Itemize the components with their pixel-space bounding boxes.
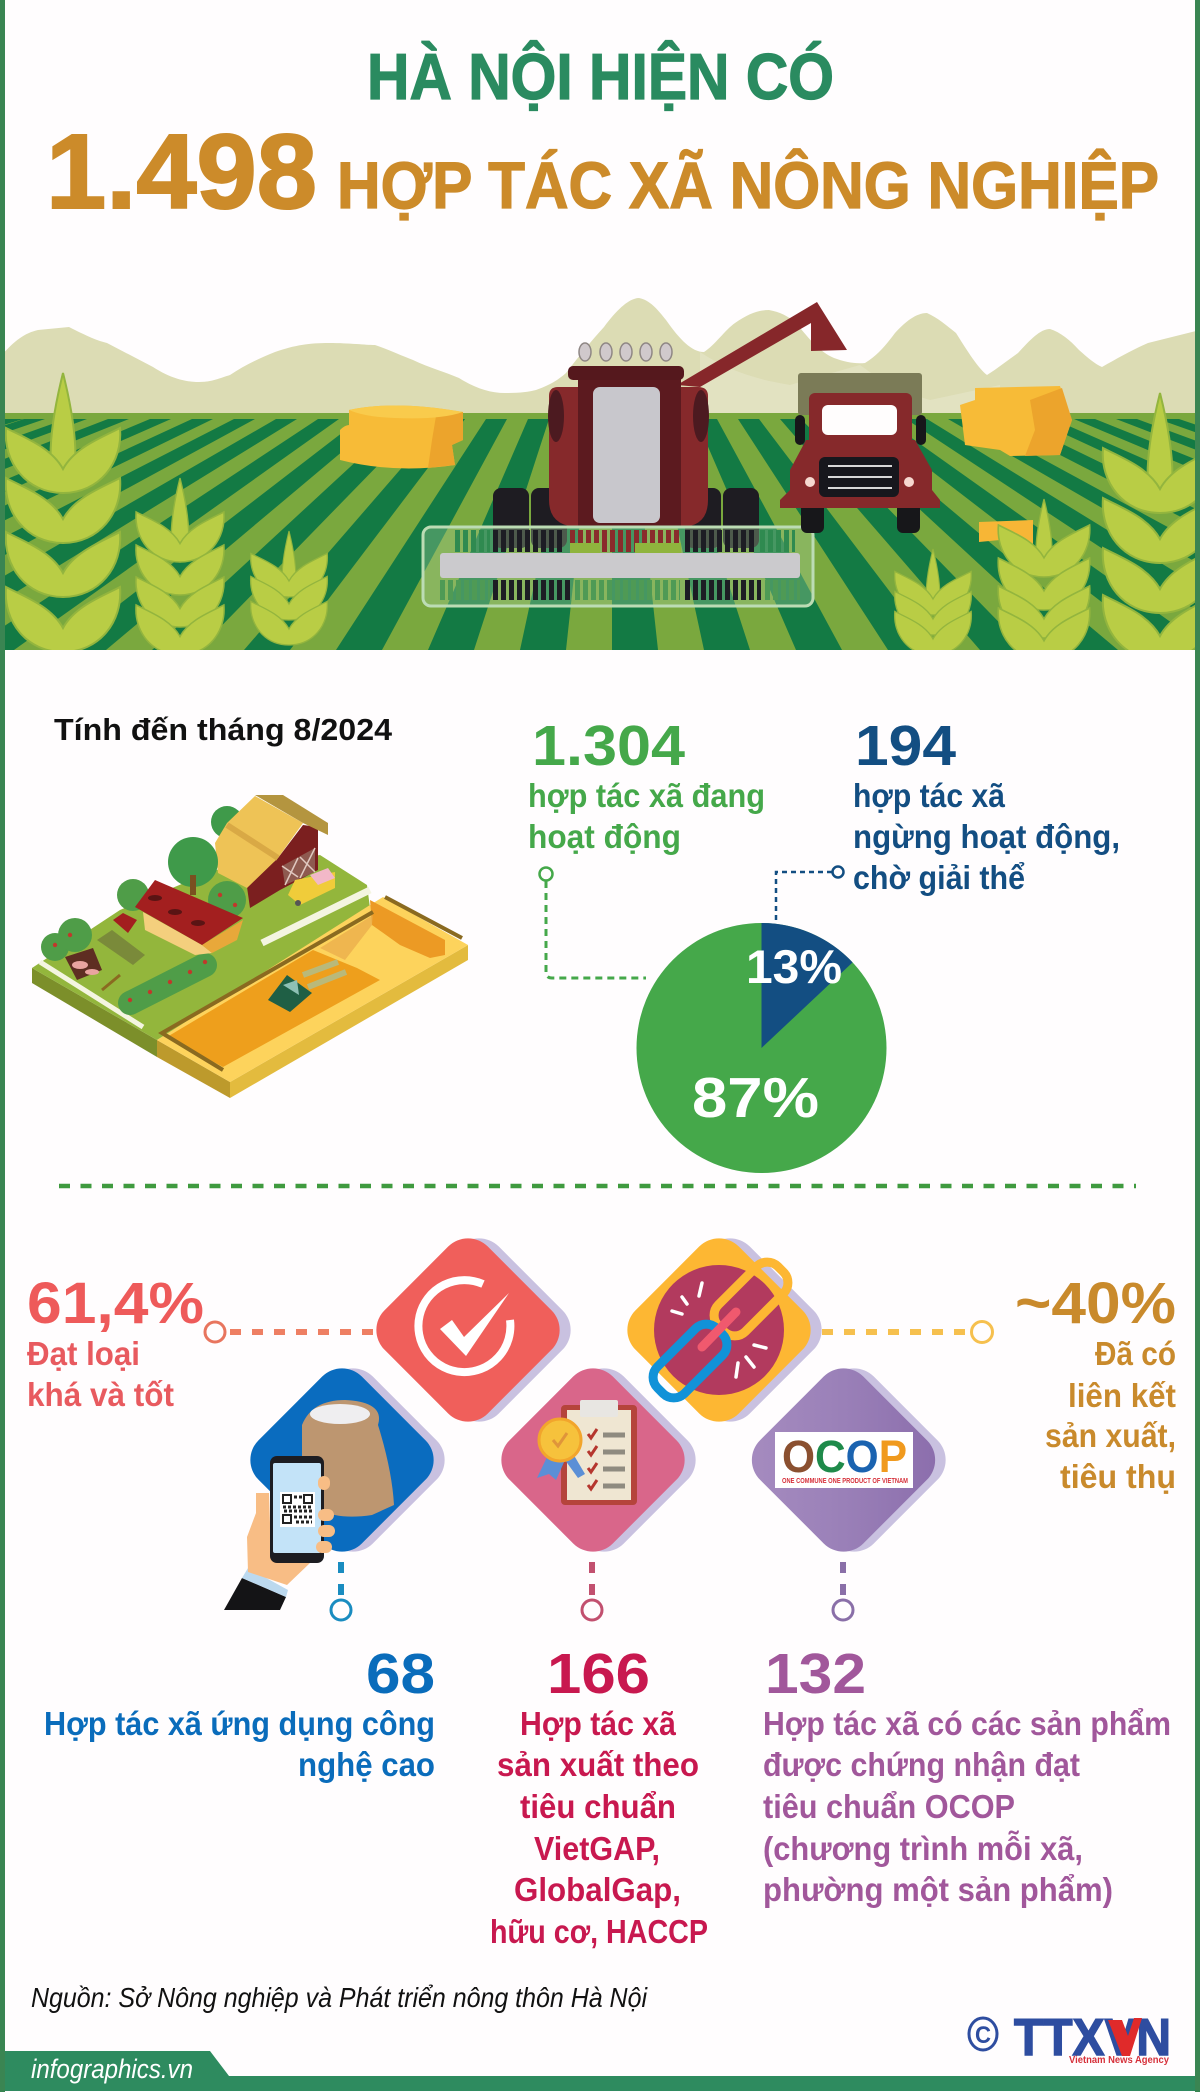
- label ~40%: [1045, 1335, 1176, 1495]
- label 61,4%: [27, 1335, 174, 1413]
- stat: 194 stopped cooperatives: [853, 714, 1120, 896]
- harvester lights: [579, 343, 672, 361]
- farm crops and pen: [65, 930, 145, 990]
- label 166: tiêu chuẩn: [520, 1788, 676, 1825]
- label ~40%: Đã có: [1095, 1335, 1176, 1372]
- striped field: [0, 413, 1200, 650]
- number 166: 166: [547, 1642, 650, 1706]
- hills: [0, 298, 1200, 420]
- icon: clipboard and medal diamond: [490, 1357, 707, 1563]
- connector: pink down: [582, 1562, 602, 1620]
- truck grill: [819, 457, 899, 497]
- hand: [247, 1493, 310, 1585]
- banner: harvest field illustration: [0, 298, 1200, 660]
- rice bag: [302, 1400, 394, 1517]
- connector: blue to pie: [776, 866, 844, 920]
- label active: hoạt động: [528, 818, 681, 855]
- label 68: Hợp tác xã ứng dụng công: [44, 1705, 435, 1742]
- harvester body: [549, 387, 708, 527]
- stat: 61,4%: [27, 1271, 204, 1413]
- wheat plants right: [895, 393, 1200, 660]
- truck window: [822, 405, 897, 435]
- site name: infographics.vn: [31, 2054, 193, 2084]
- connector: purple down: [833, 1562, 853, 1620]
- label stopped: [853, 777, 1120, 896]
- pie: 87% slice: [636, 923, 886, 1173]
- label 61,4%: khá và tốt: [27, 1376, 174, 1413]
- title line 1: HÀ NỘI HIỆN CÓ: [367, 40, 834, 113]
- illustration: isometric farm: [32, 795, 468, 1098]
- truck cab: [809, 393, 912, 440]
- label 68: [44, 1705, 435, 1783]
- icon: OCOP logo diamond: ONE COMMUNE ONE PRODUCT OF VIETNAM: [782, 1478, 908, 1485]
- label 166: VietGAP,: [534, 1830, 660, 1867]
- farm mini harvester: [268, 962, 346, 1012]
- connector: yellow: [822, 1322, 992, 1342]
- number ~40%: ~40%: [1015, 1271, 1176, 1336]
- label stopped: chờ giải thể: [853, 859, 1025, 896]
- truck: [780, 373, 940, 533]
- label 61,4%: Đạt loại: [27, 1335, 140, 1372]
- hay bale left: [340, 405, 463, 469]
- copyright mark: [969, 2018, 997, 2050]
- icon: chain link diamond: [616, 1227, 833, 1433]
- label 166: hữu cơ, HACCP: [490, 1913, 708, 1950]
- icon: QR phone and rice bag diamond: [224, 1357, 456, 1610]
- harvester wheels: [493, 488, 759, 548]
- title number: 1.498: [46, 113, 317, 231]
- truck wheels: [801, 508, 824, 533]
- title: [46, 40, 1159, 231]
- label 68: nghệ cao: [298, 1746, 435, 1783]
- farm grass: [32, 855, 370, 1040]
- label ~40%: sản xuất,: [1045, 1417, 1176, 1454]
- farm golden field: [157, 897, 468, 1082]
- connector: green to pie: [540, 868, 646, 978]
- label 166: sản xuất theo: [497, 1746, 699, 1783]
- label 132: Hợp tác xã có các sản phẩm: [763, 1705, 1171, 1742]
- fingers: [316, 1476, 335, 1553]
- stat: 166 standards: [490, 1642, 708, 1950]
- label 166: GlobalGap,: [514, 1871, 681, 1908]
- harvester header: [423, 527, 813, 606]
- icon: check mark diamond: [365, 1227, 582, 1433]
- label ~40%: tiêu thụ: [1060, 1458, 1176, 1495]
- source note: Nguồn: Sở Nông nghiệp và Phát triển nông thôn Hà Nội: [31, 1982, 648, 2013]
- connector: blue down: [331, 1562, 351, 1620]
- icon: OCOP logo diamond: OCOP: [782, 1431, 907, 1482]
- farm car: [288, 868, 335, 906]
- label 132: (chương trình mỗi xã,: [763, 1830, 1083, 1867]
- pie label 87%: 87%: [692, 1066, 819, 1130]
- label active: hợp tác xã đang: [528, 777, 765, 814]
- sleeve: [224, 1578, 286, 1610]
- farm barn: [211, 795, 328, 908]
- label stopped: ngừng hoạt động,: [853, 818, 1120, 855]
- stat: 68 high-tech: [44, 1642, 435, 1783]
- label stopped: hợp tác xã: [853, 777, 1006, 814]
- number 194: 194: [855, 714, 956, 778]
- stat: 1.304 active cooperatives: [528, 714, 765, 855]
- connector: red: [205, 1322, 376, 1342]
- number 61,4%: 61,4%: [27, 1271, 204, 1336]
- label ~40%: liên kết: [1068, 1377, 1176, 1414]
- hay bale right: [960, 386, 1072, 456]
- number 68: 68: [366, 1642, 435, 1706]
- QR code: [280, 1492, 315, 1527]
- farm road: [262, 890, 370, 943]
- hay bale small: [979, 520, 1033, 546]
- truck hood: [780, 440, 940, 508]
- pie chart: [636, 923, 886, 1173]
- harvester cab window: [593, 387, 660, 523]
- label 132: tiêu chuẩn OCOP: [763, 1788, 1015, 1825]
- copyright mark: C: [975, 2022, 991, 2049]
- date label: Tính đến tháng 8/2024: [54, 712, 393, 747]
- stat: 132 OCOP: [763, 1642, 1171, 1908]
- icon: OCOP logo diamond: [740, 1357, 957, 1563]
- farm base sides: [32, 968, 157, 1057]
- label 132: [763, 1705, 1171, 1908]
- footer band: [0, 2051, 1200, 2091]
- label 132: phường một sản phẩm): [763, 1871, 1113, 1908]
- harvester arm: [677, 302, 847, 387]
- stat: ~40%: [1015, 1271, 1176, 1495]
- pie: 13% slice: [762, 923, 853, 1048]
- harvester: [423, 302, 847, 606]
- farm trees: [41, 837, 246, 1003]
- logo: TTXVN: [969, 2009, 1171, 2067]
- number 1.304: 1.304: [532, 714, 685, 778]
- TTXVN wordmark: TTXVN: [1014, 2009, 1171, 2067]
- pie label 13%: 13%: [746, 940, 842, 993]
- label 166: [490, 1705, 708, 1950]
- label active: [528, 777, 765, 855]
- farm red house: [113, 880, 243, 955]
- number 132: 132: [765, 1642, 866, 1706]
- truck cover: [798, 373, 922, 415]
- phone: [270, 1456, 324, 1563]
- wheat plants left: [6, 373, 327, 655]
- label 132: được chứng nhận đạt: [763, 1746, 1080, 1783]
- label 166: Hợp tác xã: [520, 1705, 677, 1742]
- agency caption: Vietnam News Agency: [1069, 2055, 1169, 2066]
